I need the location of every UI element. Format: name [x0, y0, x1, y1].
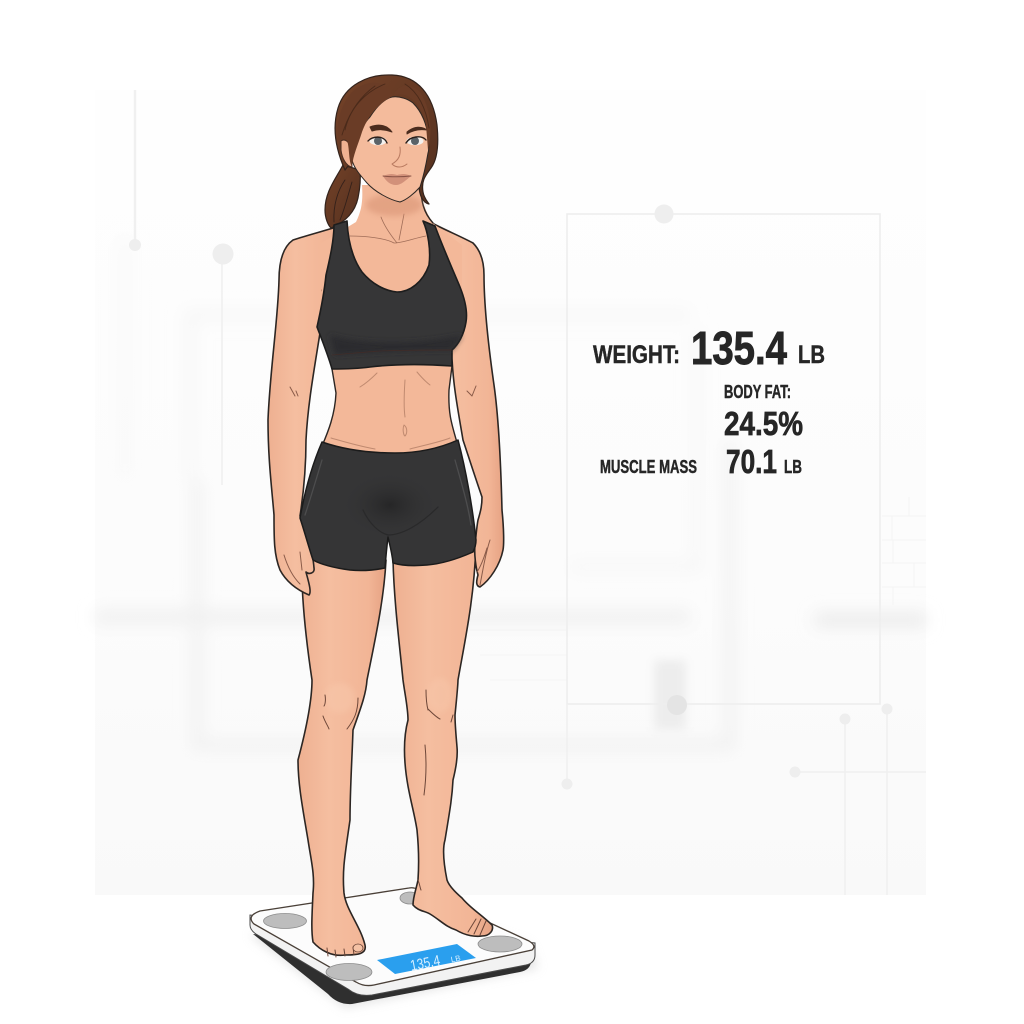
- bathroom scale: [250, 888, 538, 1008]
- hair front locks: [338, 83, 430, 167]
- stat: weight: LB: [798, 341, 825, 369]
- ear: [341, 140, 352, 167]
- scale display: [377, 944, 476, 975]
- stat: weight: 135.4: [691, 322, 787, 374]
- hair base: [335, 75, 438, 204]
- right arm and hand: [430, 222, 504, 587]
- stat: weight: WEIGHT:: [593, 341, 680, 369]
- black shorts: [300, 440, 476, 571]
- stat: weight: [593, 322, 825, 374]
- face: [352, 97, 429, 202]
- figure: woman standing: [268, 75, 504, 957]
- left leg: [298, 545, 386, 957]
- stat: body fat: 24.5%: [724, 405, 803, 442]
- scale platform side: [250, 915, 535, 995]
- ponytail: [325, 165, 360, 228]
- thin connector lines and dots: [129, 90, 926, 895]
- neck and torso: [318, 185, 462, 458]
- scale top: [251, 888, 534, 986]
- scale display: LB: [450, 954, 461, 964]
- stat: muscle mass: MUSCLE MASS: [600, 457, 697, 477]
- stat: body fat: BODY FAT:: [724, 381, 791, 402]
- stat: body fat: [724, 381, 803, 442]
- black sports bra: [317, 221, 467, 369]
- scale base edge: [253, 934, 531, 1004]
- stat: muscle mass: 70.1: [726, 443, 777, 480]
- left arm and hand: [268, 226, 345, 595]
- stat: muscle mass: [600, 443, 802, 480]
- blurred gym background panel: [95, 90, 926, 895]
- scale display: 135.4: [409, 952, 442, 975]
- stat: muscle mass: LB: [784, 457, 802, 477]
- right leg: [393, 545, 493, 936]
- sensor pads: [264, 892, 522, 980]
